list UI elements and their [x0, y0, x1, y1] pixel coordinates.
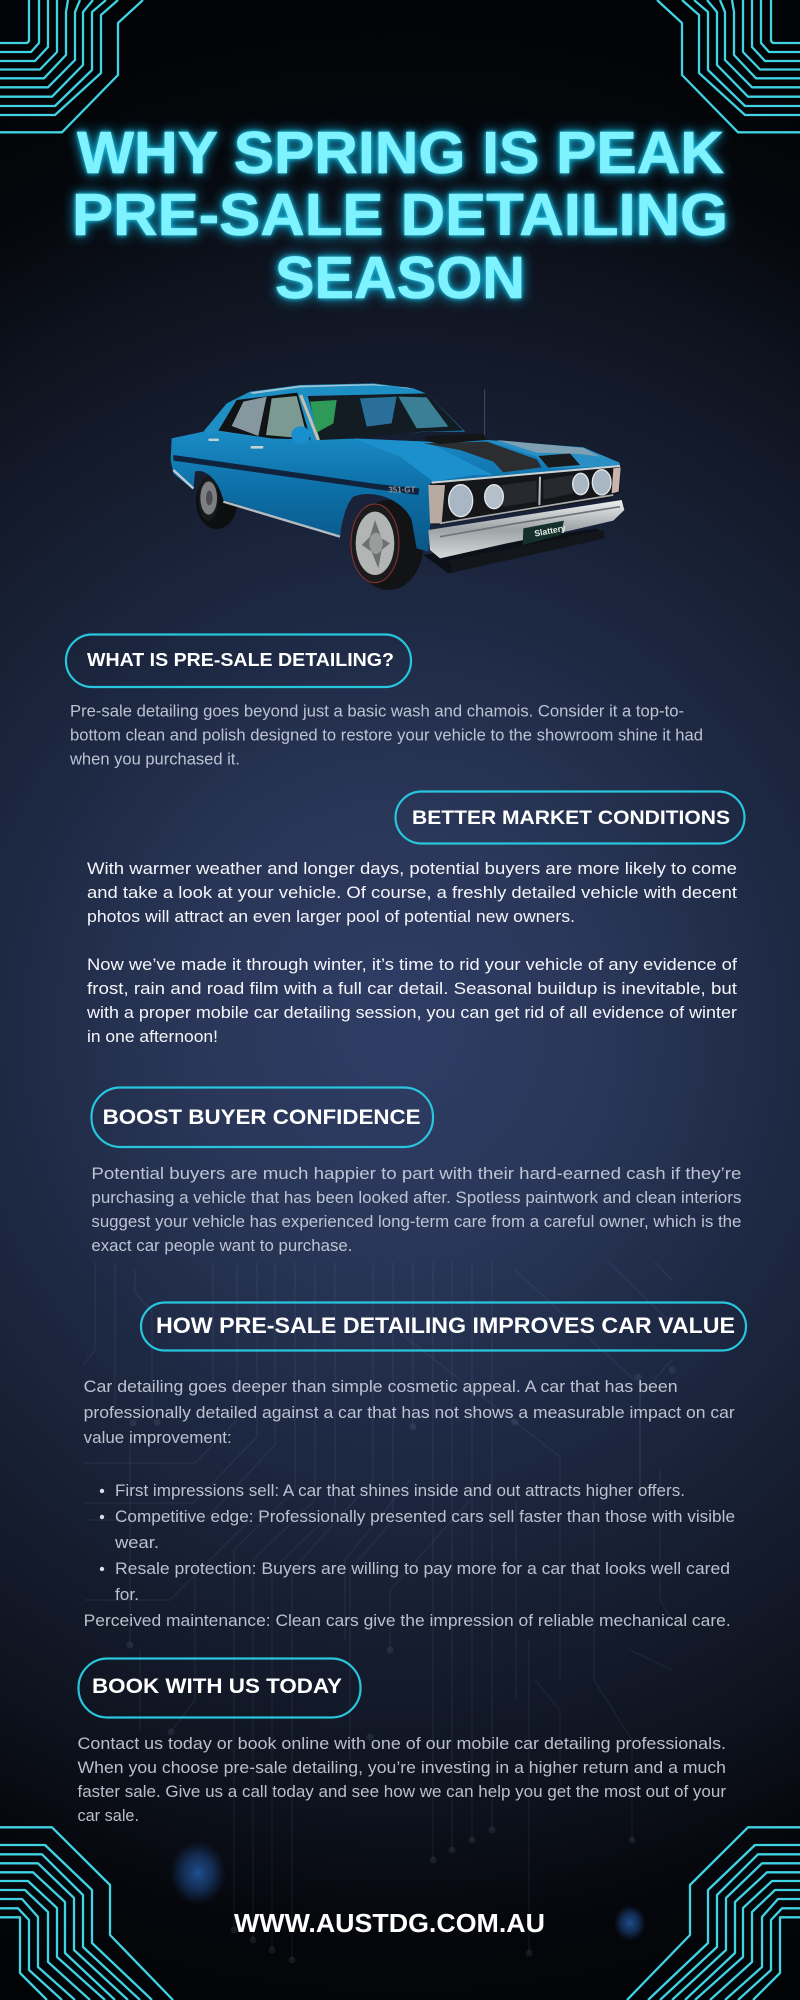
rear wheel: [196, 474, 237, 529]
hood scoop: [425, 433, 486, 444]
paragraph: car sale.: [78, 1807, 139, 1825]
car illustration: [171, 383, 624, 590]
front grille panel: [430, 467, 621, 525]
corner lines: bottom left: [0, 1827, 173, 2000]
paragraph: [69, 703, 703, 769]
windshield: [308, 393, 463, 440]
paragraph: [91, 1165, 741, 1255]
paragraphs: and take a look at your vehicle. Of course, a freshly detailed vehicle with decent: [87, 884, 737, 902]
heading pill: [396, 792, 744, 844]
icon: blue glow right: [614, 1905, 646, 1941]
bullet list: Competitive edge: Professionally presented cars sell faster than those with visible: [115, 1508, 735, 1526]
intro paragraph: value improvement:: [84, 1429, 232, 1447]
side chrome trim: [223, 502, 340, 537]
hood stripes: [423, 442, 542, 472]
title: PRE-SALE DETAILING: [72, 182, 728, 248]
bullet list: wear.: [114, 1534, 159, 1552]
paragraphs: frost, rain and road film with a full car detail. Seasonal buildup is inevitable, but: [87, 980, 737, 998]
roof: [203, 383, 465, 440]
section: boost buyer confidence: [91, 1088, 741, 1255]
paragraph: When you choose pre-sale detailing, you’re investing in a higher return and a much: [78, 1759, 726, 1777]
bumper: [428, 500, 624, 558]
number plate: [523, 521, 564, 545]
paragraph: Pre-sale detailing goes beyond just a basic wash and chamois. Consider it a top-to-: [70, 703, 684, 721]
paragraph: Contact us today or book online with one of our mobile car detailing professionals.: [78, 1735, 726, 1753]
bullet list: [100, 1482, 735, 1604]
headlights: [449, 470, 611, 517]
under bumper: [448, 530, 605, 572]
paragraph: exact car people want to purchase.: [91, 1237, 352, 1255]
bullet list: for.: [115, 1586, 139, 1604]
icon: blue glow left: [170, 1841, 226, 1905]
paragraph: when you purchased it.: [69, 751, 240, 769]
section: what is pre-sale detailing: [66, 634, 703, 769]
paragraphs: with a proper mobile car detailing session, you can get rid of all evidence of winter: [86, 1004, 738, 1022]
paragraph: suggest your vehicle has experienced long-term care from a careful owner, which is the: [91, 1213, 741, 1231]
corner lines: top right: [657, 0, 800, 132]
bullet list: Resale protection: Buyers are willing to pay more for a car that looks well cared: [115, 1560, 730, 1578]
heading text: WHAT IS PRE-SALE DETAILING?: [87, 649, 394, 670]
intro paragraph: [84, 1378, 735, 1447]
front wheel: [351, 500, 423, 590]
circuit board background pattern: [83, 1262, 676, 1964]
paragraph: [78, 1735, 727, 1825]
A pillar and mirror: [301, 395, 318, 440]
corner lines: bottom right: [627, 1827, 800, 2000]
section: how pre-sale detailing improves car value: [84, 1302, 746, 1630]
paragraphs: photos will attract an even larger pool of potential new owners.: [87, 908, 575, 926]
paragraph: faster sale. Give us a call today and see how we can help you get the most out of your: [78, 1783, 727, 1801]
antenna: [483, 389, 486, 435]
intro paragraph: professionally detailed against a car that has not shows a measurable impact on car: [84, 1404, 735, 1422]
paragraphs: With warmer weather and longer days, potential buyers are more likely to come: [87, 860, 737, 878]
plate text: Slattery: [533, 523, 567, 539]
side windows: [218, 393, 311, 439]
intro paragraph: Car detailing goes deeper than simple cosmetic appeal. A car that has been: [84, 1378, 678, 1396]
paragraph: purchasing a vehicle that has been looked after. Spotless paintwork and clean interiors: [91, 1189, 741, 1207]
bullet list: First impressions sell: A car that shines inside and out attracts higher offers.: [115, 1482, 685, 1500]
door handles: [208, 439, 263, 449]
paragraphs: in one afternoon!: [87, 1028, 218, 1046]
title: [72, 120, 728, 311]
heading pill: [78, 1658, 360, 1718]
paragraph: bottom clean and polish designed to restore your vehicle to the showroom shine it had: [70, 727, 703, 745]
corner lines: top left: [0, 0, 143, 132]
car body side: [171, 432, 620, 552]
paragraphs: [86, 860, 738, 1046]
website url: WWW.AUSTDG.COM.AU: [234, 1908, 545, 1938]
title: SEASON: [275, 245, 525, 311]
paragraph: Potential buyers are much happier to part with their hard-earned cash if they’re: [91, 1165, 741, 1183]
section: book with us today: [78, 1658, 727, 1825]
side stripe: [173, 455, 419, 495]
hood highlight: [353, 438, 493, 482]
paragraphs: Now we’ve made it through winter, it’s time to rid your vehicle of any evidence of: [87, 956, 737, 974]
closing line: Perceived maintenance: Clean cars give the impression of reliable mechanical care.: [84, 1612, 731, 1630]
title: WHY SPRING IS PEAK: [77, 120, 724, 186]
heading pill: [92, 1088, 433, 1147]
heading text: BOOK WITH US TODAY: [92, 1675, 342, 1698]
heading text: BETTER MARKET CONDITIONS: [412, 807, 730, 829]
heading text: HOW PRE-SALE DETAILING IMPROVES CAR VALUE: [156, 1313, 735, 1338]
section: better market conditions: [86, 792, 744, 1046]
heading text: BOOST BUYER CONFIDENCE: [103, 1106, 421, 1129]
heading pill: [66, 634, 411, 687]
badge: 351·GT: [388, 486, 416, 495]
car shadow: [423, 528, 605, 573]
heading pill: [141, 1302, 746, 1350]
